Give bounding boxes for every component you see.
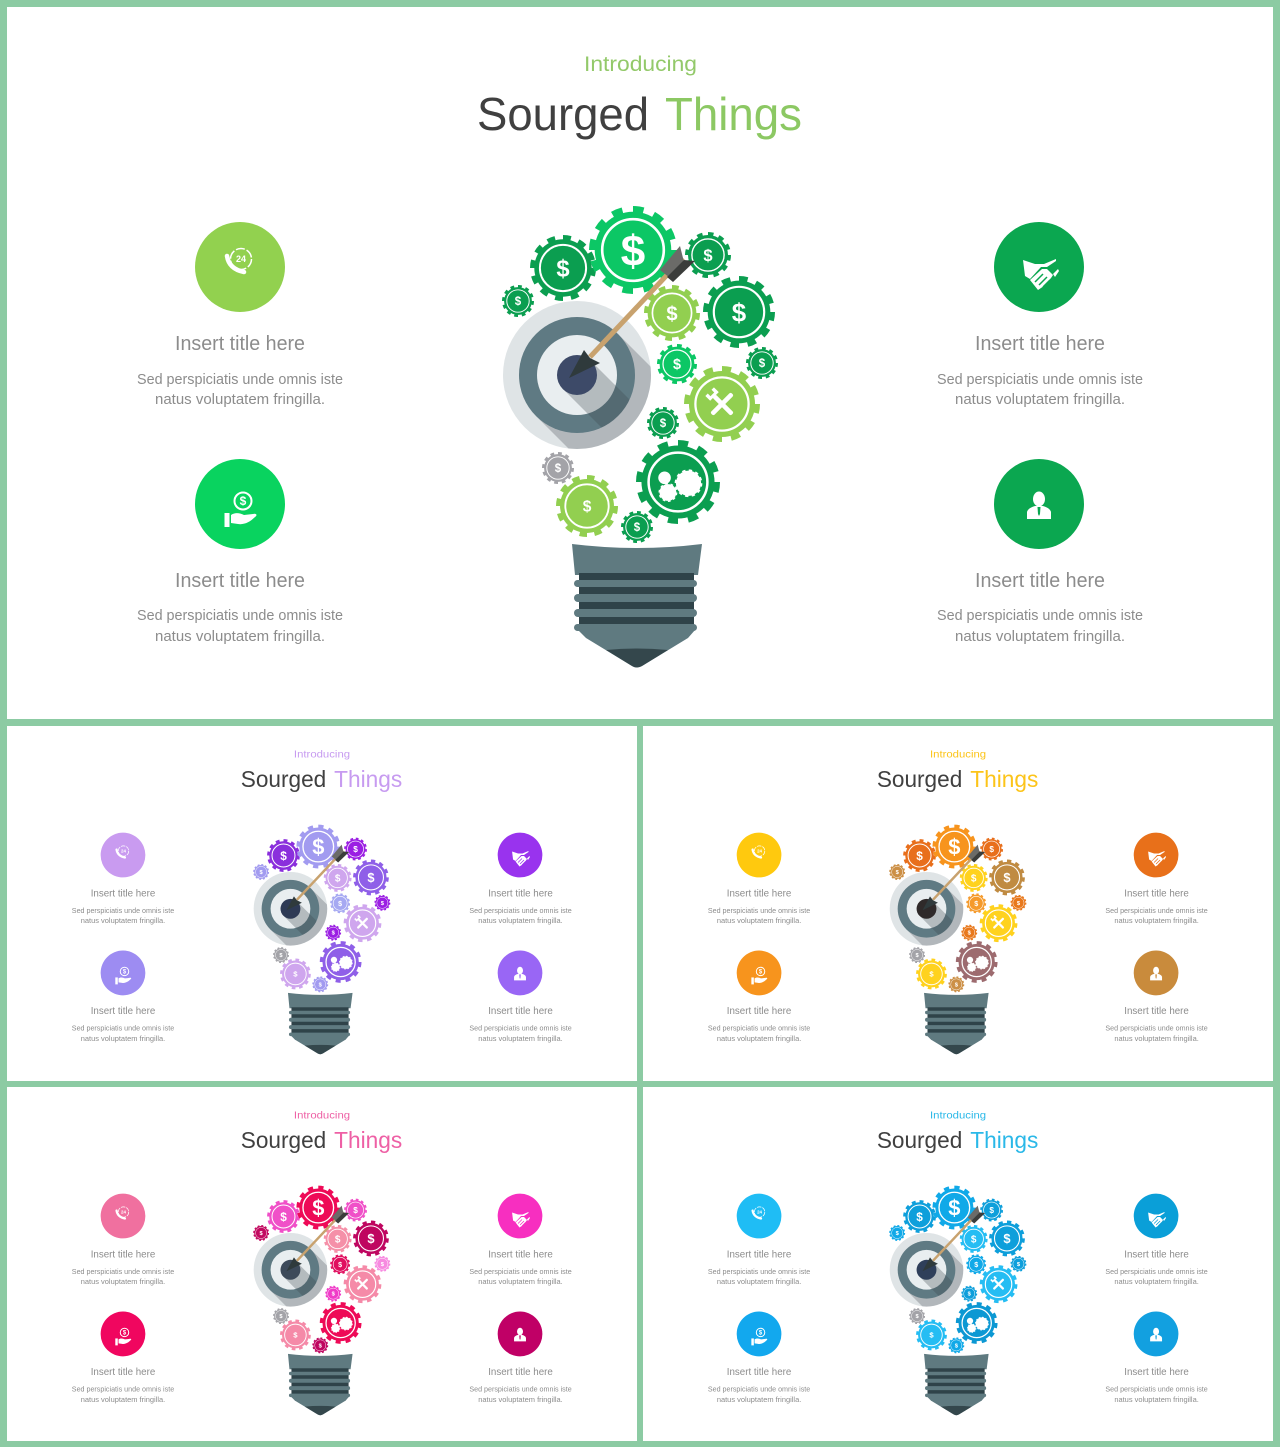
- text block: top left: natus voluptatem fringilla.: [81, 916, 165, 925]
- bulb base: [924, 1354, 989, 1415]
- illustration: gear light bulb: $: [279, 1314, 283, 1320]
- text block: bottom right: Sed perspiciatis unde omnis iste: [937, 607, 1143, 624]
- illustration: gear light bulb: $: [1003, 1231, 1011, 1246]
- heading: introducing: Introducing: [294, 1111, 350, 1122]
- text block: top left: Sed perspiciatis unde omnis iste: [72, 906, 174, 915]
- icon: handshake: [1134, 1194, 1178, 1238]
- illustration: gear light bulb: $: [555, 463, 562, 475]
- illustration: gear light bulb: $: [280, 849, 287, 863]
- text block: bottom right: natus voluptatem fringilla.: [1114, 1395, 1199, 1404]
- icon: 24 hour phone: 24: [757, 849, 763, 854]
- illustration: gear light bulb: $: [381, 1262, 385, 1268]
- text block: bottom right: Insert title here: [975, 570, 1105, 592]
- text block: top right: [1105, 888, 1208, 925]
- illustration: gear light bulb: $: [948, 1195, 960, 1220]
- text block: top left: Sed perspiciatis unde omnis iste: [137, 371, 343, 388]
- icon: 24 hour phone: [195, 222, 285, 312]
- text block: top left: [708, 888, 810, 925]
- text block: top left: Insert title here: [727, 1249, 792, 1260]
- illustration: gear light bulb: $: [673, 357, 681, 373]
- illustration: gear light bulb: $: [971, 1235, 977, 1246]
- heading: introducing: Introducing: [584, 53, 697, 76]
- illustration: gear light bulb: $: [916, 1210, 923, 1224]
- illustration: gear light bulb: $: [335, 1235, 341, 1246]
- text block: top right: Sed perspiciatis unde omnis iste: [1105, 1267, 1208, 1276]
- text block: bottom right: Sed perspiciatis unde omnis iste: [1105, 1385, 1208, 1394]
- text block: top left: natus voluptatem fringilla.: [717, 916, 801, 925]
- text block: top right: Sed perspiciatis unde omnis iste: [1105, 906, 1208, 915]
- illustration: gear light bulb: $: [660, 418, 667, 430]
- text block: top right: Sed perspiciatis unde omnis iste: [937, 371, 1143, 388]
- illustration: gear light bulb: $: [279, 953, 283, 959]
- illustration: gear light bulb: $: [948, 834, 960, 859]
- panel: pink slide: [7, 1087, 637, 1441]
- text block: bottom left: Insert title here: [727, 1006, 792, 1017]
- illustration: gear light bulb: $: [666, 303, 678, 325]
- illustration: gear light bulb: $: [989, 845, 994, 854]
- icon: handshake: [498, 1194, 542, 1238]
- text block: top left: Insert title here: [727, 888, 792, 899]
- bulb base: [572, 544, 702, 668]
- text block: top right: natus voluptatem fringilla.: [1114, 916, 1199, 925]
- panel: main green slide: [7, 7, 1273, 719]
- target: [254, 872, 361, 979]
- illustration: gear light bulb: $: [338, 1261, 342, 1269]
- title: Sourged: [877, 766, 962, 792]
- illustration: gear light bulb: $: [732, 299, 747, 327]
- icon: hand with coin: [737, 1312, 781, 1356]
- title: [241, 1127, 402, 1153]
- panel: orange slide: [643, 726, 1273, 1081]
- illustration: gear light bulb: $: [915, 953, 919, 959]
- text block: bottom right: Insert title here: [1124, 1367, 1189, 1378]
- illustration: gear light bulb: $: [260, 870, 264, 876]
- text block: bottom right: natus voluptatem fringilla.: [478, 1034, 563, 1043]
- illustration: gear light bulb: [254, 1187, 390, 1415]
- title: Things: [970, 766, 1038, 792]
- icon: hand with coin: $: [759, 1330, 763, 1336]
- title: Things: [334, 766, 402, 792]
- text block: top right: [937, 333, 1143, 408]
- text block: top right: natus voluptatem fringilla.: [478, 916, 563, 925]
- text block: top right: natus voluptatem fringilla.: [478, 1277, 563, 1286]
- icon: person: [498, 1312, 542, 1356]
- text block: bottom right: [469, 1367, 572, 1404]
- icon: 24 hour phone: 24: [121, 1210, 126, 1215]
- text block: bottom right: natus voluptatem fringilla.: [955, 628, 1125, 645]
- icon: handshake: [1134, 833, 1178, 877]
- arrow: [923, 1206, 985, 1271]
- text block: bottom right: Insert title here: [488, 1367, 553, 1378]
- icon: 24 hour phone: 24: [121, 849, 126, 854]
- illustration: gear light bulb: $: [556, 256, 570, 283]
- title: [877, 766, 1038, 792]
- illustration: gear light bulb: $: [896, 870, 900, 876]
- icon: hand with coin: [195, 459, 285, 549]
- target: [890, 1233, 997, 1340]
- arrow: [923, 845, 985, 910]
- illustration: gear light bulb: $: [335, 874, 341, 885]
- icon: hand with coin: $: [123, 969, 127, 975]
- title: Sourged: [241, 766, 326, 792]
- icon: person: [1134, 1312, 1178, 1356]
- text block: bottom right: [1105, 1006, 1208, 1043]
- text block: top right: Insert title here: [488, 1249, 553, 1260]
- text block: bottom right: [937, 570, 1143, 645]
- text block: top left: Sed perspiciatis unde omnis iste: [72, 1267, 174, 1276]
- illustration: gear light bulb: $: [583, 499, 592, 516]
- title: Sourged: [877, 1127, 962, 1153]
- illustration: gear light bulb: $: [915, 1314, 919, 1320]
- bulb base: [288, 993, 353, 1054]
- text block: top left: [708, 1249, 810, 1286]
- bulb base: [924, 993, 989, 1054]
- text block: top left: Insert title here: [91, 1249, 156, 1260]
- icon: handshake: [498, 833, 542, 877]
- illustration: gear light bulb: $: [968, 1292, 972, 1298]
- arrow: [569, 246, 695, 378]
- illustration: gear light bulb: $: [367, 870, 375, 885]
- text block: bottom right: Sed perspiciatis unde omnis iste: [469, 1024, 572, 1033]
- text block: top right: [469, 1249, 572, 1286]
- illustration: gear light bulb: $: [974, 900, 978, 908]
- icon: 24 hour phone: [737, 1194, 781, 1238]
- arrow: [286, 845, 349, 910]
- text block: top left: [72, 888, 174, 925]
- panel: purple slide: [7, 726, 637, 1081]
- icon: hand with coin: [737, 951, 781, 995]
- illustration: gear light bulb: $: [955, 1343, 959, 1349]
- icon: 24 hour phone: [101, 1194, 145, 1238]
- illustration: gear light bulb: $: [312, 1195, 324, 1220]
- illustration: gear light bulb: [890, 1187, 1026, 1415]
- illustration: gear light bulb: [254, 826, 390, 1054]
- text block: top left: Sed perspiciatis unde omnis iste: [708, 906, 810, 915]
- title: Things: [334, 1127, 402, 1153]
- illustration: gear light bulb: $: [974, 1261, 978, 1269]
- text block: top left: [137, 333, 343, 408]
- text block: bottom right: Insert title here: [488, 1006, 553, 1017]
- illustration: gear light bulb: $: [621, 227, 645, 276]
- illustration: gear light bulb: $: [332, 1292, 336, 1298]
- illustration: gear light bulb: $: [353, 1206, 358, 1215]
- target: [890, 872, 997, 979]
- text block: top left: natus voluptatem fringilla.: [155, 391, 325, 408]
- title: [241, 766, 402, 792]
- icon: person: [994, 459, 1084, 549]
- text block: bottom left: Sed perspiciatis unde omnis iste: [72, 1024, 174, 1033]
- illustration: gear light bulb: $: [332, 931, 336, 937]
- icon: handshake: [994, 222, 1084, 312]
- illustration: gear light bulb: $: [759, 358, 766, 370]
- icon: hand with coin: [101, 1312, 145, 1356]
- illustration: gear light bulb: $: [968, 931, 972, 937]
- text block: bottom right: Sed perspiciatis unde omnis iste: [469, 1385, 572, 1394]
- illustration: gear light bulb: $: [989, 1206, 994, 1215]
- illustration: gear light bulb: $: [367, 1231, 375, 1246]
- illustration: gear light bulb: $: [280, 1210, 287, 1224]
- text block: top left: Insert title here: [91, 888, 156, 899]
- illustration: gear light bulb: $: [293, 970, 298, 979]
- icon: 24 hour phone: [737, 833, 781, 877]
- text block: bottom left: [708, 1367, 810, 1404]
- text block: top right: Sed perspiciatis unde omnis iste: [469, 906, 572, 915]
- arrow: [286, 1206, 349, 1271]
- target: [503, 301, 718, 516]
- title: Things: [970, 1127, 1038, 1153]
- icon: 24 hour phone: [101, 833, 145, 877]
- text block: bottom left: natus voluptatem fringilla.: [81, 1395, 165, 1404]
- illustration: gear light bulb: $: [338, 900, 342, 908]
- icon: hand with coin: [101, 951, 145, 995]
- illustration: gear light bulb: $: [929, 970, 934, 979]
- title: [877, 1127, 1038, 1153]
- illustration: gear light bulb: $: [312, 834, 324, 859]
- heading: introducing: Introducing: [930, 750, 986, 761]
- text block: bottom left: [72, 1367, 174, 1404]
- heading: introducing: Introducing: [930, 1111, 986, 1122]
- illustration: gear light bulb: $: [703, 246, 713, 265]
- heading: introducing: Introducing: [294, 750, 350, 761]
- illustration: gear light bulb: $: [634, 522, 641, 534]
- text block: top right: natus voluptatem fringilla.: [1114, 1277, 1199, 1286]
- text block: bottom left: natus voluptatem fringilla.: [717, 1034, 801, 1043]
- icon: person: [1134, 951, 1178, 995]
- text block: top right: Insert title here: [1124, 888, 1189, 899]
- text block: top left: Sed perspiciatis unde omnis iste: [708, 1267, 810, 1276]
- illustration: gear light bulb: $: [293, 1331, 298, 1340]
- illustration: gear light bulb: $: [1017, 901, 1021, 907]
- illustration: gear light bulb: $: [955, 982, 959, 988]
- text block: top left: Insert title here: [175, 333, 305, 355]
- text block: bottom left: [72, 1006, 174, 1043]
- text block: bottom left: [708, 1006, 810, 1043]
- icon: person: [498, 951, 542, 995]
- text block: bottom left: natus voluptatem fringilla.: [717, 1395, 801, 1404]
- text block: top right: [1105, 1249, 1208, 1286]
- icon: hand with coin: $: [240, 494, 247, 508]
- text block: top right: Insert title here: [1124, 1249, 1189, 1260]
- illustration: gear light bulb: $: [916, 849, 923, 863]
- text block: top right: [469, 888, 572, 925]
- text block: top right: Insert title here: [975, 333, 1105, 355]
- text block: bottom left: Insert title here: [91, 1006, 156, 1017]
- text block: bottom left: [137, 570, 343, 645]
- text block: bottom left: Sed perspiciatis unde omnis iste: [137, 607, 343, 624]
- text block: top right: Sed perspiciatis unde omnis iste: [469, 1267, 572, 1276]
- title: Sourged: [241, 1127, 326, 1153]
- text block: top left: natus voluptatem fringilla.: [717, 1277, 801, 1286]
- text block: bottom left: natus voluptatem fringilla.: [81, 1034, 165, 1043]
- text block: bottom right: Sed perspiciatis unde omnis iste: [1105, 1024, 1208, 1033]
- text block: bottom left: Sed perspiciatis unde omnis iste: [708, 1385, 810, 1394]
- illustration: gear light bulb: $: [319, 1343, 323, 1349]
- text block: bottom left: Sed perspiciatis unde omnis iste: [72, 1385, 174, 1394]
- text block: bottom left: Insert title here: [727, 1367, 792, 1378]
- illustration: gear light bulb: $: [381, 901, 385, 907]
- panel: blue slide: [643, 1087, 1273, 1441]
- text block: bottom left: Insert title here: [91, 1367, 156, 1378]
- text block: bottom right: [469, 1006, 572, 1043]
- text block: bottom right: natus voluptatem fringilla.: [1114, 1034, 1199, 1043]
- text block: bottom left: Sed perspiciatis unde omnis iste: [708, 1024, 810, 1033]
- text block: bottom right: Insert title here: [1124, 1006, 1189, 1017]
- text block: bottom left: natus voluptatem fringilla.: [155, 628, 325, 645]
- title: [477, 88, 802, 140]
- illustration: gear light bulb: $: [260, 1231, 264, 1237]
- text block: bottom right: [1105, 1367, 1208, 1404]
- text block: bottom left: Insert title here: [175, 570, 305, 592]
- title: Things: [665, 88, 802, 140]
- text block: top right: natus voluptatem fringilla.: [955, 391, 1125, 408]
- icon: hand with coin: $: [123, 1330, 127, 1336]
- text block: top left: natus voluptatem fringilla.: [81, 1277, 165, 1286]
- illustration: gear light bulb: $: [971, 874, 977, 885]
- illustration: gear light bulb: $: [353, 845, 358, 854]
- text block: top right: Insert title here: [488, 888, 553, 899]
- illustration: gear light bulb: $: [896, 1231, 900, 1237]
- illustration: gear light bulb: $: [515, 296, 522, 308]
- bulb base: [288, 1354, 353, 1415]
- illustration: gear light bulb: $: [319, 982, 323, 988]
- text block: bottom right: natus voluptatem fringilla.: [478, 1395, 563, 1404]
- text block: top left: [72, 1249, 174, 1286]
- illustration: gear light bulb: [503, 210, 777, 667]
- icon: hand with coin: $: [759, 969, 763, 975]
- illustration: gear light bulb: $: [1017, 1262, 1021, 1268]
- illustration: gear light bulb: $: [1003, 870, 1011, 885]
- illustration: gear light bulb: [890, 826, 1026, 1054]
- title: Sourged: [477, 88, 649, 140]
- target: [254, 1233, 361, 1340]
- icon: 24 hour phone: 24: [236, 254, 246, 264]
- illustration: gear light bulb: $: [929, 1331, 934, 1340]
- icon: 24 hour phone: 24: [757, 1210, 763, 1215]
